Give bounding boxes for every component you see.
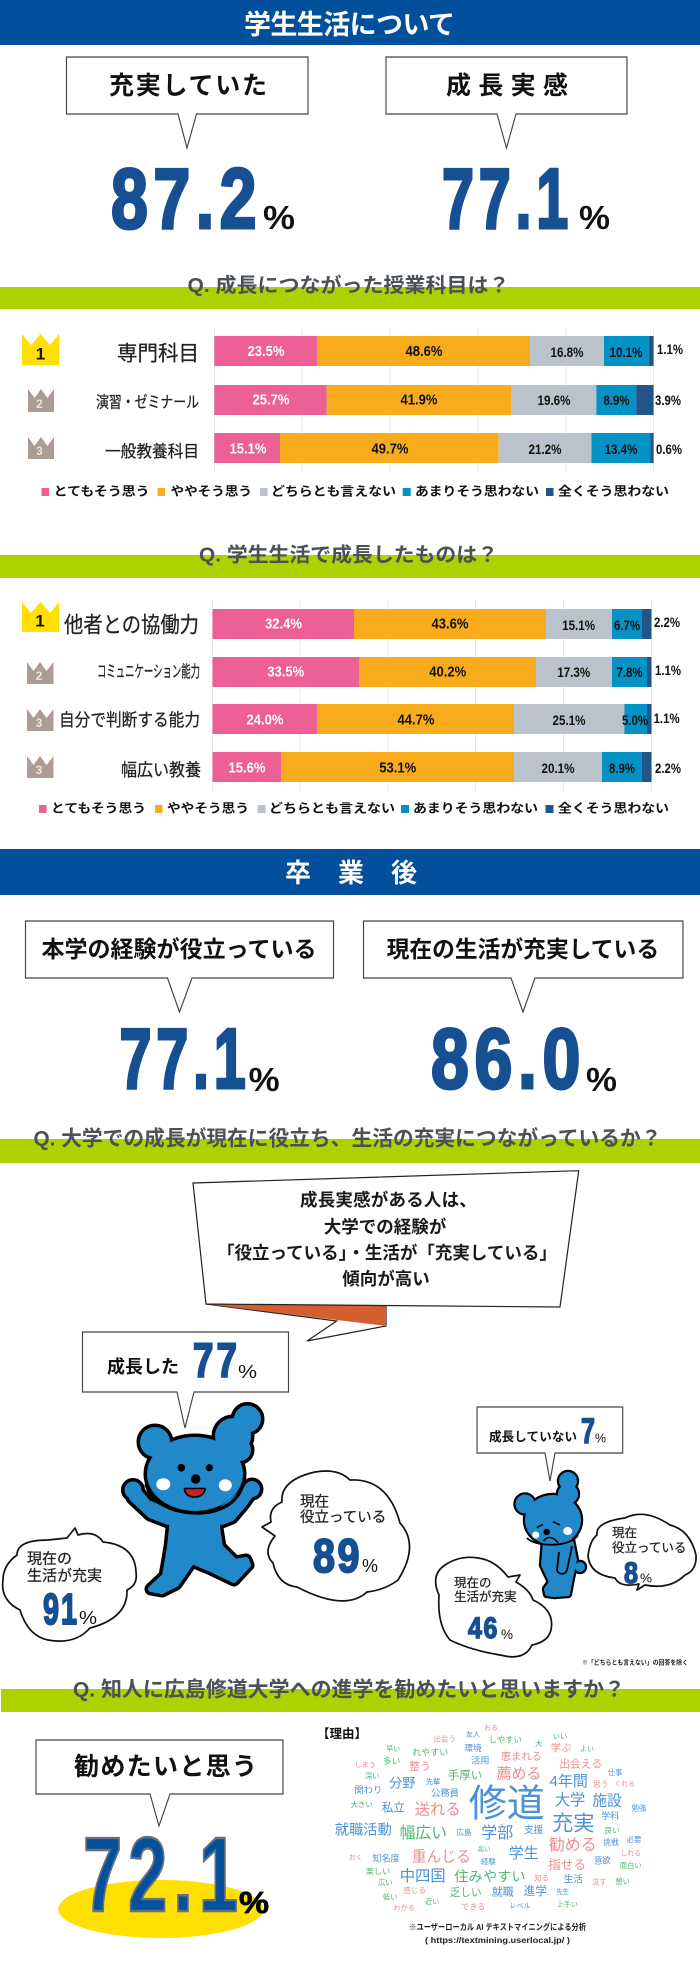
word cloud: reasons: 上手い	[557, 1899, 578, 1908]
row: 他者との協働力: 6.7%	[614, 617, 640, 633]
rank labels: 成長したもの: 自分で判断する能力	[59, 710, 200, 730]
callout: 成長実感がある人は: 成長実感がある人は、	[300, 1190, 477, 1210]
word cloud: reasons: 4年間	[550, 1773, 588, 1790]
stat: 87.2%: 87.2	[111, 152, 262, 247]
word cloud: reasons: しれる	[620, 1850, 641, 1858]
word cloud: reasons: 必要	[627, 1835, 641, 1844]
callout: 成長実感がある人は: 「役立っている」・生活が「充実している」	[217, 1243, 557, 1263]
row: 幅広い教養: 2.2%	[655, 760, 681, 776]
row: コミュニケーション能力: 7.8%	[616, 664, 643, 680]
icon: crown rank 3: 3	[36, 716, 43, 730]
icon: crown rank 2	[27, 662, 54, 684]
word cloud: reasons: 近い	[425, 1897, 439, 1906]
word cloud: reasons: 挑戦	[603, 1837, 619, 1847]
icon: crown rank 2	[28, 389, 54, 412]
word cloud: reasons: できる	[461, 1902, 485, 1912]
word cloud: reasons: 関わり	[354, 1785, 382, 1795]
word cloud: reasons: 良い	[604, 1825, 620, 1835]
row: コミュニケーション能力	[212, 657, 681, 687]
heading: 理由: 【理由】	[317, 1726, 367, 1741]
thought bubble: 現在役立っている 8%: 現在	[612, 1526, 637, 1540]
row: 演習・ゼミナール: 8.9%	[604, 392, 630, 408]
row: 演習・ゼミナール: 3.9%	[655, 392, 681, 408]
word cloud: reasons: しまう	[355, 1761, 376, 1769]
word cloud: reasons: 学科	[601, 1810, 619, 1821]
word cloud: reasons: 大学	[555, 1792, 585, 1809]
stat: 87.2%: %	[263, 199, 295, 236]
row: 演習・ゼミナール: 19.6%	[538, 392, 571, 408]
word cloud: reasons: 感じる	[403, 1885, 426, 1895]
thought bubble: 現在役立っている 8%: 8	[624, 1557, 638, 1590]
icon: crown rank 3 second: 3	[36, 763, 43, 777]
callout: 成長した 77%: 成長した	[107, 1356, 179, 1377]
word cloud: reasons: 低い	[383, 1892, 397, 1902]
icon: crown rank 1	[22, 334, 59, 365]
row: 他者との協働力	[212, 609, 680, 639]
character: sad blue bear	[516, 1472, 585, 1595]
callout: 現在の生活が充実している: 現在の生活が充実している	[387, 936, 659, 962]
callout: 成長していない 7%	[477, 1407, 623, 1481]
thought bubble: 現在役立っている 89%: 役立っている	[300, 1509, 386, 1526]
row: 他者との協働力: 2.2%	[654, 614, 680, 630]
word cloud: reasons: 面白い	[620, 1861, 642, 1870]
stat: 86.0%: %	[586, 1061, 617, 1098]
thought bubble: 現在役立っている 89%: %	[362, 1556, 378, 1576]
section header: 学生生活について: 学生生活について	[244, 10, 455, 40]
callout: 充実していた	[66, 57, 308, 148]
thought bubble: 現在の生活が充実 46%: 生活が充実	[454, 1589, 517, 1604]
row: 幅広い教養: 8.9%	[609, 760, 635, 776]
row: 一般教養科目: 13.4%	[604, 441, 638, 457]
stat: 77.1%: 77.1	[120, 1012, 250, 1107]
word cloud: reasons: おる	[484, 1724, 498, 1732]
section header: 卒業後	[0, 849, 700, 895]
row: 幅広い教養: 53.1%	[379, 760, 416, 776]
thought bubble: 現在の生活が充実 91%	[3, 1528, 136, 1641]
row: 専門科目: 16.8%	[550, 344, 584, 360]
word cloud: reasons: 就職活動	[335, 1821, 392, 1838]
word cloud: reasons: 学部	[481, 1824, 513, 1842]
legend: 成長したもの: ややそう思う	[167, 802, 249, 816]
word cloud: reasons: 活用	[471, 1754, 490, 1765]
legend: 授業科目: あまりそう思わない	[415, 484, 539, 498]
word cloud: reasons: 生活	[564, 1872, 583, 1886]
question band: 学生生活で成長したものは？: Q. 学生生活で成長したものは？	[199, 542, 498, 566]
row: 一般教養科目: 21.2%	[528, 441, 562, 457]
thought bubble: 現在役立っている 89%: 89	[313, 1529, 362, 1582]
callout: 成長実感: 成長実感	[446, 72, 568, 100]
stat: 86.0%: 86.0	[431, 1012, 586, 1107]
word cloud: reasons: 恵まれる	[501, 1750, 542, 1763]
word cloud: reasons: 多い	[383, 1755, 400, 1766]
row: コミュニケーション能力: 17.3%	[557, 664, 591, 680]
row: 一般教養科目: 0.6%	[656, 441, 682, 457]
row: 自分で判断する能力: 1.1%	[654, 710, 680, 726]
word cloud: reasons: 知名度	[372, 1853, 400, 1864]
word cloud: reasons: 広い	[378, 1878, 393, 1887]
word cloud: reasons: 楽しい	[366, 1866, 390, 1876]
word cloud: reasons: 乏しい	[450, 1887, 482, 1899]
word cloud: reasons: 修道	[469, 1783, 545, 1825]
thought bubble: 現在の生活が充実 46%: 46	[468, 1612, 499, 1645]
word cloud: reasons: 幅広い	[400, 1824, 447, 1842]
thought bubble: 現在の生活が充実 46%	[436, 1557, 552, 1657]
legend: 授業科目: 全くそう思わない	[558, 484, 669, 498]
callout: 成長していない 7%: 成長していない	[489, 1429, 577, 1444]
word cloud: reasons: 私立	[382, 1800, 405, 1814]
row: 他者との協働力: 32.4%	[265, 616, 302, 632]
thought bubble: 現在の生活が充実 91%: 91	[43, 1585, 79, 1634]
row: 専門科目: 23.5%	[248, 343, 284, 360]
callout: 成長していない 7%: %	[595, 1430, 606, 1446]
row: 他者との協働力: 15.1%	[562, 617, 596, 633]
icon: crown rank 3	[27, 709, 54, 731]
word cloud: reasons: 整う	[409, 1760, 431, 1773]
row: 幅広い教養: 20.1%	[542, 760, 575, 776]
icon: crown rank 3	[28, 437, 54, 459]
stat: 72.1% on yellow ellipse: 72.1	[83, 1816, 244, 1934]
legend: 授業科目: どちらとも言えない	[271, 484, 396, 498]
word cloud: reasons: 中四国	[400, 1868, 446, 1885]
rank labels: 授業科目: 専門科目	[117, 342, 199, 366]
word cloud: reasons: 手厚い	[448, 1768, 482, 1782]
word cloud: reasons: 指せる	[548, 1858, 586, 1872]
word cloud: reasons: 環境	[464, 1742, 482, 1753]
row: 自分で判断する能力: 24.0%	[246, 712, 284, 728]
chart: 授業科目 stacked bars	[214, 327, 683, 473]
character: happy blue bear	[124, 1406, 261, 1591]
credit: text mining source	[409, 1922, 586, 1945]
word cloud: reasons: 先生	[556, 1887, 570, 1896]
word cloud: reasons: おく	[349, 1854, 363, 1862]
credit: text mining source: ( https://textmining.userlocal.jp/ )	[425, 1935, 570, 1945]
word cloud: reasons: 施設	[592, 1793, 622, 1810]
word cloud: reasons: 勧める	[549, 1836, 597, 1854]
legend: 成長したもの: あまりそう思わない	[413, 802, 538, 816]
section header: 卒業後: 卒業後	[285, 858, 417, 888]
word cloud: reasons: 公務員	[431, 1787, 459, 1798]
footnote: ※「どちらとも言えない」の回答を除く	[582, 1658, 688, 1666]
row: 専門科目: 1.1%	[657, 341, 683, 357]
thought bubble: 現在役立っている 8%	[588, 1514, 696, 1590]
icon: crown rank 3 second	[27, 756, 54, 778]
callout: 成長した 77%: %	[238, 1362, 257, 1382]
thought bubble: 現在の生活が充実 91%: 現在の	[27, 1550, 72, 1568]
legend: 成長したもの: 全くそう思わない	[558, 800, 669, 816]
word cloud: reasons: 進学	[524, 1884, 547, 1898]
row: 専門科目: 10.1%	[610, 344, 643, 360]
thought bubble: 現在の生活が充実 46%: %	[501, 1626, 513, 1642]
row: 演習・ゼミナール	[214, 385, 681, 415]
icon: crown rank 2: 2	[36, 669, 43, 683]
section header: 学生生活について	[0, 0, 700, 45]
word cloud: reasons: 大	[535, 1739, 542, 1748]
row: コミュニケーション能力: 33.5%	[267, 664, 304, 680]
row: コミュニケーション能力: 40.2%	[429, 664, 466, 680]
rank labels: 授業科目: 演習・ゼミナール	[96, 394, 199, 412]
icon: crown rank 3: 3	[36, 444, 43, 458]
rank labels: 授業科目: 一般教養科目	[105, 442, 199, 461]
word cloud: reasons: 流す	[592, 1878, 607, 1886]
rank labels: 成長したもの: 他者との協働力	[64, 612, 199, 638]
row: 幅広い教養: 15.6%	[228, 760, 266, 776]
question band: 知人に進学を勧めたいか: Q. 知人に広島修道大学への進学を勧めたいと思いますか？	[73, 1678, 625, 1702]
word cloud: reasons: 憩い	[615, 1877, 630, 1886]
row: 他者との協働力: 43.6%	[432, 616, 468, 632]
legend: 成長したもの	[39, 800, 669, 816]
word cloud: reasons: 広島	[456, 1827, 472, 1837]
thought bubble: 現在の生活が充実 46%: 現在の	[454, 1576, 492, 1590]
word cloud: reasons: 知る	[534, 1874, 549, 1882]
word cloud: reasons: 就職	[492, 1885, 514, 1899]
word cloud: reasons: 意欲	[594, 1856, 611, 1866]
legend: 成長したもの: とてもそう思う	[51, 802, 146, 816]
word cloud: reasons: 深い	[365, 1772, 379, 1780]
word cloud: reasons: よい	[580, 1745, 594, 1753]
rank labels: 成長したもの: 幅広い教養	[121, 760, 201, 780]
word cloud: reasons: しやすい	[489, 1734, 522, 1744]
word cloud: reasons: 充実	[552, 1811, 595, 1835]
thought bubble: 現在役立っている 89%	[262, 1471, 410, 1601]
callout: 本学の経験が役立っている	[26, 921, 334, 1012]
word cloud: reasons: 重んじる	[412, 1849, 471, 1866]
word cloud: reasons: 仕事	[608, 1768, 622, 1777]
row: コミュニケーション能力: 1.1%	[655, 662, 681, 678]
rank labels: 授業科目	[96, 342, 199, 461]
legend: 授業科目: ややそう思う	[170, 484, 252, 498]
stat: 72.1% on yellow ellipse: %	[239, 1885, 269, 1920]
callout: 本学の経験が役立っている: 本学の経験が役立っている	[42, 936, 316, 962]
icon: crown rank 1: 1	[36, 344, 45, 364]
word cloud: reasons: レベル	[509, 1902, 531, 1910]
row: 幅広い教養	[212, 752, 681, 782]
callout: 充実していた: 充実していた	[109, 72, 267, 100]
question band: 大学での成長	[0, 1126, 700, 1163]
word cloud: reasons: 大きい	[351, 1800, 373, 1809]
callout: 成長実感	[386, 57, 627, 148]
word cloud: reasons: くれる	[614, 1780, 635, 1788]
icon: crown rank 1: 1	[35, 612, 45, 630]
word cloud: reasons: 経験	[481, 1857, 496, 1866]
word cloud: reasons: わかる	[394, 1904, 415, 1912]
legend: 成長したもの: どちらとも言えない	[269, 800, 395, 816]
row: 演習・ゼミナール: 25.7%	[252, 392, 290, 408]
word cloud: reasons: 先輩	[426, 1777, 440, 1786]
icon: crown rank 2: 2	[36, 397, 43, 411]
word cloud: reasons: 友人	[466, 1730, 480, 1738]
word cloud: reasons: 支援	[524, 1823, 544, 1836]
thought bubble: 現在役立っている 89%: 現在	[300, 1494, 329, 1511]
thought bubble: 現在役立っている 8%: %	[640, 1570, 652, 1586]
word cloud: reasons: 出会う	[433, 1734, 456, 1744]
icon: crown rank 1	[22, 602, 59, 632]
word cloud: reasons: 思う	[593, 1780, 608, 1789]
callout: 成長実感がある人は: 大学での経験が	[324, 1217, 447, 1237]
word cloud: reasons: 薦める	[497, 1765, 541, 1782]
row: 一般教養科目	[214, 433, 682, 463]
question band: 成長につながった授業科目は？	[0, 273, 700, 309]
word cloud: reasons: 出会える	[559, 1758, 602, 1771]
callout: 成長実感がある人は: 傾向が高い	[342, 1269, 430, 1289]
question band: 学生生活で成長したものは？	[0, 542, 700, 578]
row: 自分で判断する能力: 44.7%	[398, 712, 434, 728]
stat: 77.1%: %	[249, 1061, 280, 1098]
stat: 72.1% on yellow ellipse	[58, 1816, 269, 1938]
row: 一般教養科目: 49.7%	[372, 440, 408, 458]
word cloud: reasons: 高い	[478, 1844, 490, 1853]
callout: 勧めたいと思う: 勧めたいと思う	[74, 1753, 257, 1781]
callout: 成長していない 7%: 7	[581, 1412, 595, 1451]
row: 自分で判断する能力	[212, 704, 680, 734]
rank labels: 成長したもの	[59, 612, 201, 780]
word cloud: reasons	[335, 1724, 647, 1912]
callout: 現在の生活が充実している	[364, 921, 683, 1012]
row: 一般教養科目: 15.1%	[230, 440, 266, 458]
callout: 成長実感がある人は	[193, 1171, 579, 1341]
legend: 授業科目: とてもそう思う	[54, 484, 150, 498]
thought bubble: 現在役立っている 8%: 役立っている	[612, 1540, 686, 1555]
question band: 成長につながった授業科目は？: Q. 成長につながった授業科目は？	[188, 273, 510, 297]
stat: 77.1%: 77.1	[442, 152, 573, 247]
thought bubble: 現在の生活が充実 91%: %	[79, 1608, 97, 1628]
chart: 成長したもの stacked bars	[212, 600, 681, 791]
callout: 成長した 77%	[82, 1332, 288, 1428]
rank labels: 成長したもの: コミュニケーション能力	[97, 662, 200, 681]
row: 専門科目	[214, 336, 683, 366]
credit: text mining source: ※ユーザーローカル AI テキストマイニングによる分析	[409, 1922, 586, 1932]
question band: 知人に進学を勧めたいか	[1, 1678, 700, 1712]
row: 専門科目: 48.6%	[406, 343, 442, 360]
callout: 勧めたいと思う	[36, 1740, 283, 1826]
word cloud: reasons: 学ぶ	[551, 1742, 571, 1754]
word cloud: reasons: いい	[553, 1732, 567, 1741]
word cloud: reasons: 早い	[386, 1745, 400, 1753]
question band: 大学での成長: Q. 大学での成長が現在に役立ち、生活の充実につながっているか？	[34, 1126, 662, 1150]
word cloud: reasons: れやすい	[412, 1748, 448, 1758]
legend: 授業科目	[42, 484, 669, 498]
word cloud: reasons: 送れる	[415, 1802, 461, 1818]
row: 自分で判断する能力: 25.1%	[552, 712, 586, 728]
word cloud: reasons: 勉強	[632, 1804, 647, 1812]
word cloud: reasons: 分野	[389, 1776, 416, 1790]
word cloud: reasons: 住みやすい	[454, 1868, 526, 1885]
word cloud: reasons: 学生	[509, 1845, 539, 1862]
row: 自分で判断する能力: 5.0%	[622, 712, 648, 728]
thought bubble: 現在の生活が充実 91%: 生活が充実	[27, 1568, 102, 1584]
row: 演習・ゼミナール: 41.9%	[400, 392, 438, 408]
callout: 成長した 77%: 77	[193, 1335, 240, 1388]
stat: 77.1%: %	[579, 199, 610, 236]
